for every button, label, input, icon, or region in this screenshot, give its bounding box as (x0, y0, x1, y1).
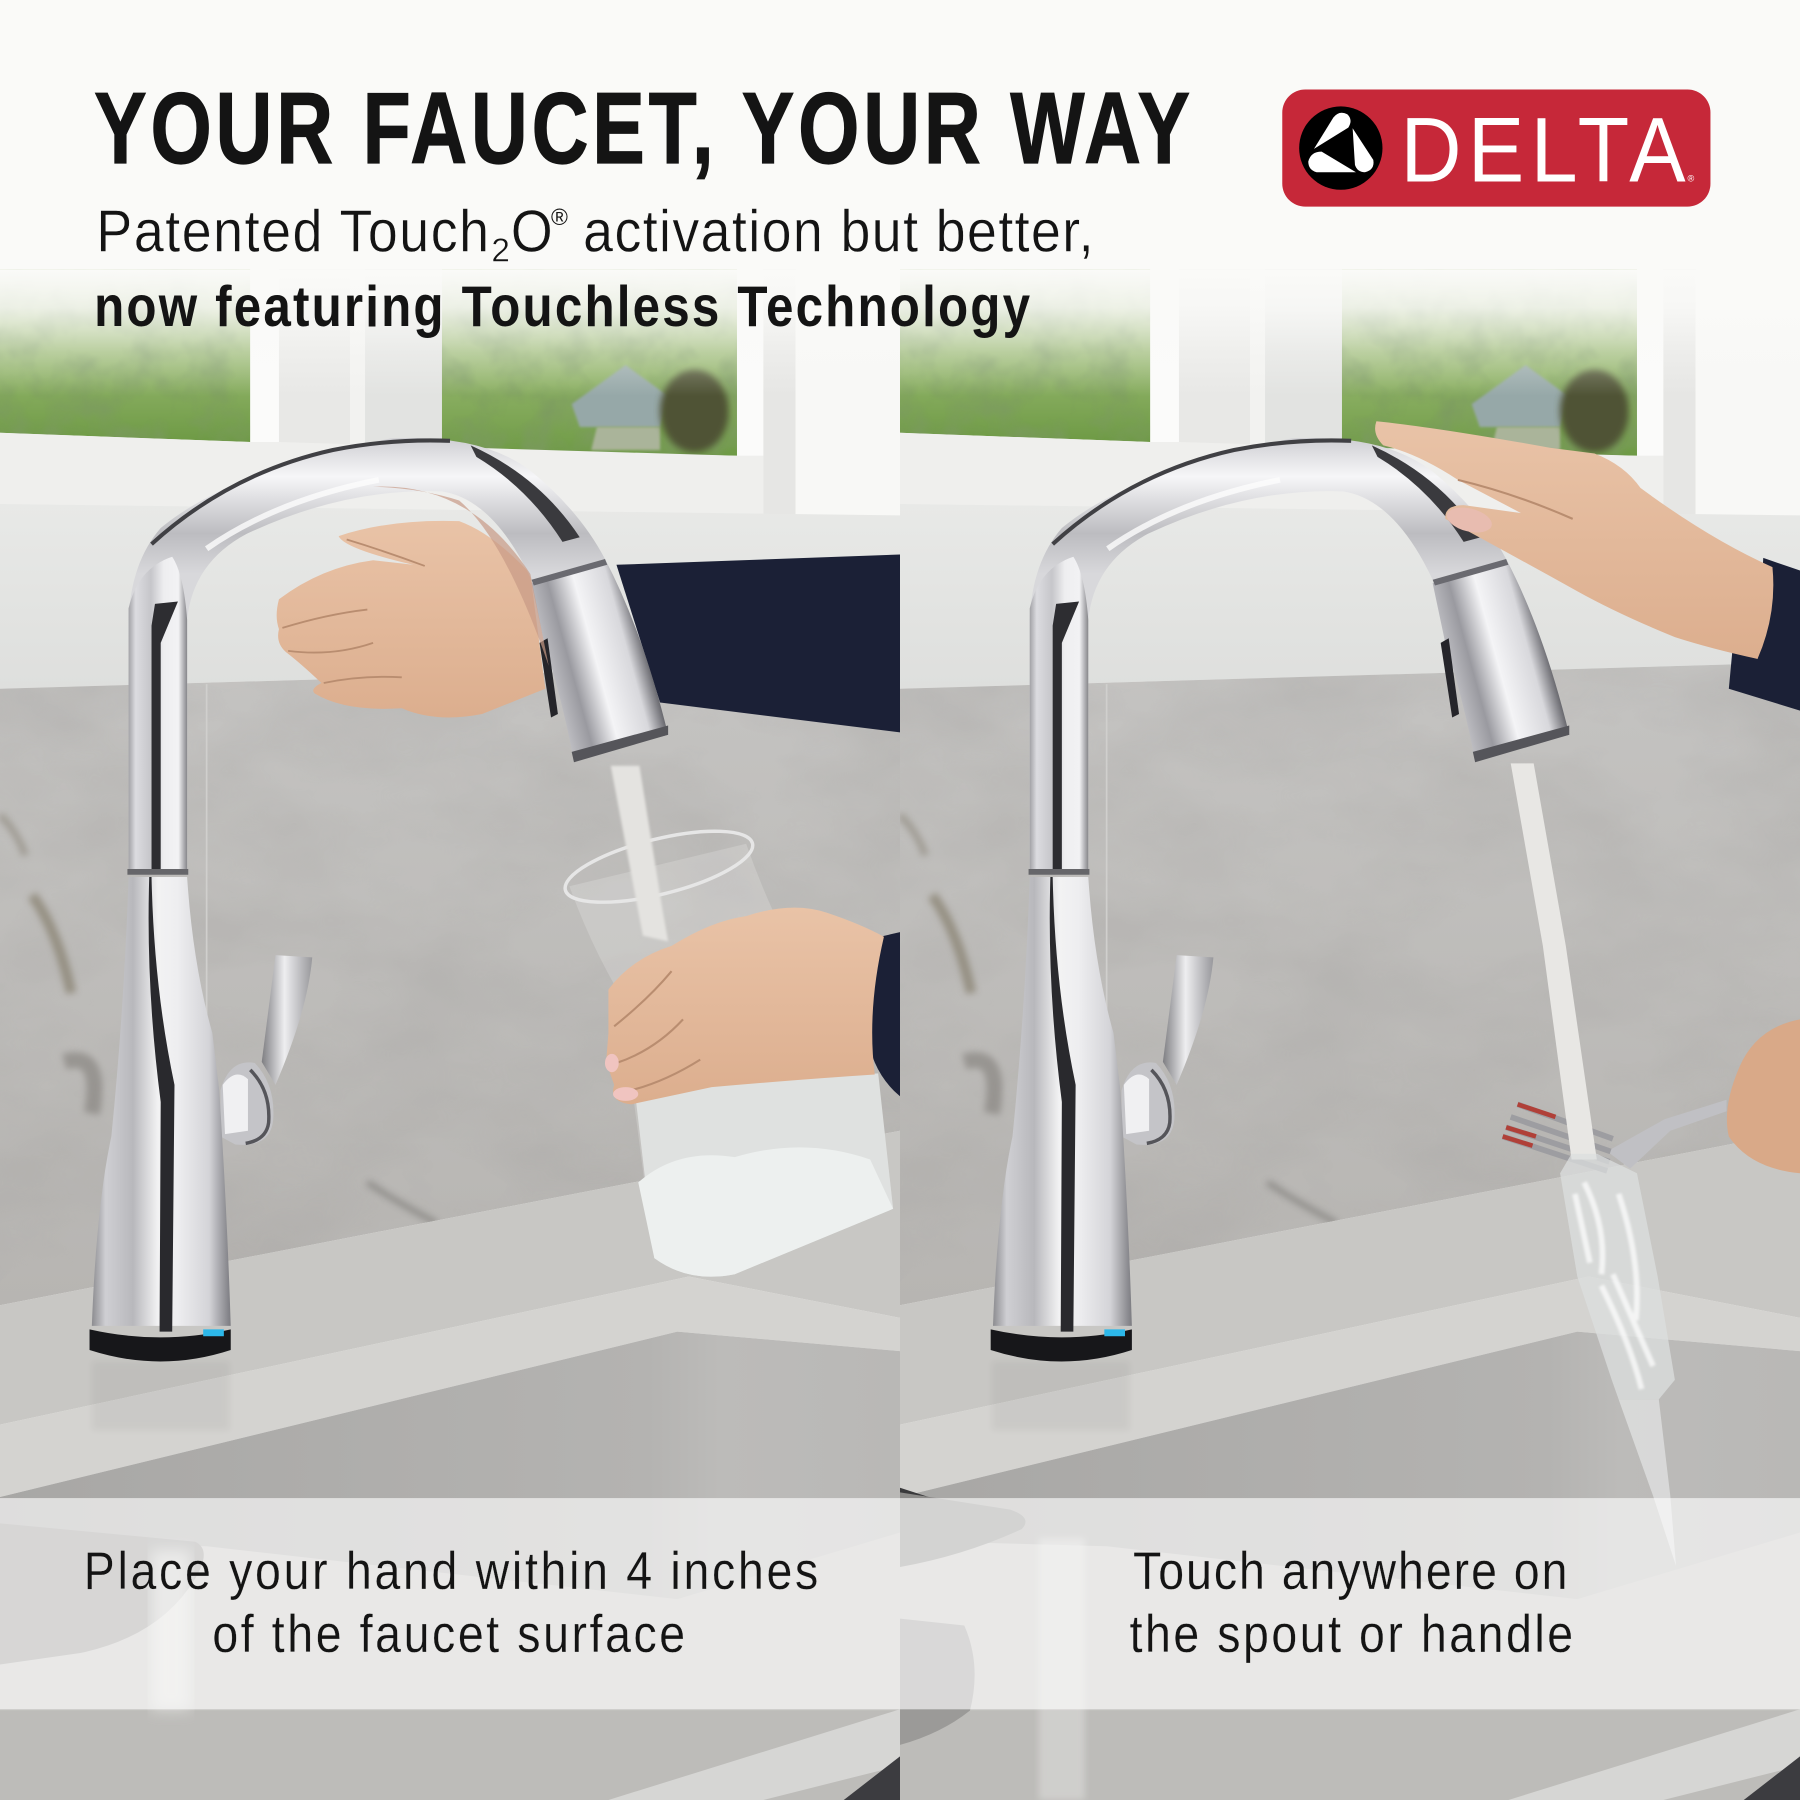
carafe (559, 817, 893, 1277)
caption: touchless: Place your hand within 4 inches (84, 1541, 818, 1600)
water stream (1511, 763, 1676, 1566)
caption: touchless: of the faucet surface (212, 1604, 685, 1664)
subheading line 2: now featuring Touchless Technology (94, 276, 1030, 339)
plates (900, 1488, 1085, 1800)
splash (1560, 1154, 1675, 1399)
skin reflection in spout (373, 487, 549, 666)
subheading line 1: ® (551, 204, 568, 230)
logo mark (1299, 106, 1382, 190)
nail (1447, 508, 1492, 532)
logo wordmark: DELTA (1401, 98, 1686, 201)
hand: hovering (277, 521, 545, 718)
subheading line 1: activation but better, (583, 199, 1094, 265)
kitchen backdrop (0, 270, 900, 1800)
sink highlight (152, 1550, 191, 1710)
subheading line 1: 2 (491, 233, 510, 270)
water in carafe (638, 1147, 893, 1277)
panel: touch activation (900, 270, 1800, 1800)
subheading line 1: Patented Touch (96, 199, 489, 265)
cuff (872, 932, 900, 1096)
headline: YOUR FAUCET, YOUR WAY (94, 73, 1190, 185)
falling thread (1619, 1399, 1676, 1566)
caption: touch (1130, 1541, 1573, 1664)
caption: touch: Touch anywhere on (1133, 1541, 1567, 1600)
registered mark: ® (1688, 173, 1695, 183)
hand: holding carafe (606, 908, 884, 1104)
carafe rim (564, 830, 754, 904)
faucet (991, 438, 1569, 1361)
panel: touchless activation (0, 270, 900, 1800)
subheading line 1: O (511, 199, 553, 265)
plate (0, 1523, 204, 1665)
fork (1503, 1100, 1727, 1171)
logo: Delta (1282, 90, 1710, 207)
hand: touching spout (1375, 421, 1773, 659)
hand: holding fork (1727, 1019, 1800, 1173)
caption: touchless (84, 1541, 818, 1664)
kitchen backdrop (900, 270, 1800, 1800)
water stream (611, 766, 668, 941)
nails (605, 1054, 638, 1101)
sleeve (616, 554, 900, 732)
carafe lower glass (636, 1074, 893, 1208)
caption: touch: the spout or handle (1130, 1604, 1573, 1664)
cuff (1729, 558, 1800, 711)
faucet (90, 438, 668, 1361)
subheading line 1 (96, 199, 1094, 270)
caption band (0, 1498, 1800, 1709)
